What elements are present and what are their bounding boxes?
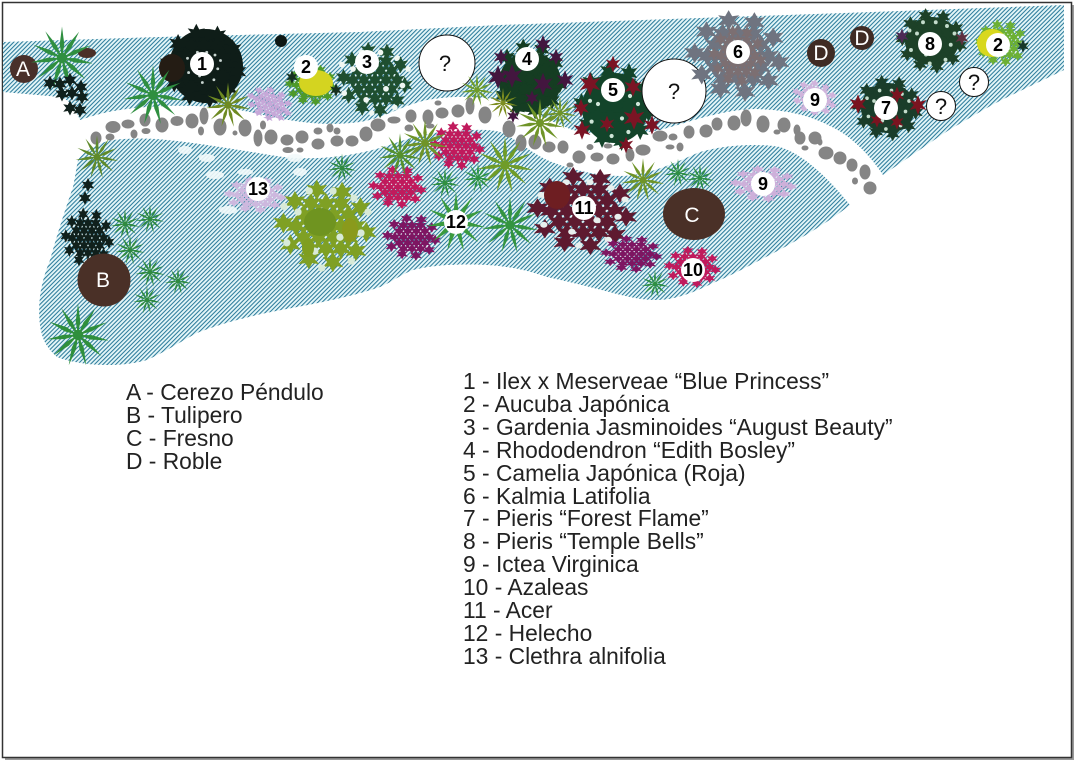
legend: trees: B - Tulipero [126,402,243,428]
shrub 6: Kalmia: 6 [733,42,743,62]
shrub 3: Gardenia [336,42,412,118]
legend: plants: 4 - Rhododendron “Edith Bosley” [463,437,795,463]
shrub 11: Acer: 11 [574,198,594,218]
hatched garden beds [3,5,1064,365]
olive shrub [273,180,377,272]
legend: plants: 12 - Helecho [463,620,592,646]
large fern bottom left [46,304,109,366]
black dot marker [275,35,287,47]
olive fern near Acer [621,158,665,201]
legend: plants [463,368,893,669]
small fern above olive shrub [328,154,356,182]
small ferns near B [110,205,191,314]
unknown plant circle upper [960,68,988,96]
shrub 4: Rhododendron [488,35,573,123]
olive ferns at path [378,120,538,253]
plant 9: Ictea upper: 9 [810,90,820,110]
legend: plants: 1 - Ilex x Meserveae “Blue Princess” [463,368,829,394]
shrub 1: Ilex: 1 [197,54,207,74]
tree C: Fresno: C [684,204,700,227]
legend: plants: 13 - Clethra alnifolia [463,643,666,669]
unknown plant circle large [419,35,475,91]
plant 9: Ictea lower: 9 [758,174,768,194]
white flowers around 13 [178,146,307,214]
lilac plant [240,79,299,128]
legend: plants: 6 - Kalmia Latifolia [463,483,651,509]
shrub 6: Kalmia [684,10,789,102]
unknown plant circle large: ? [439,51,451,76]
dark shrub near B [60,178,114,269]
legend: plants: 7 - Pieris “Forest Flame” [463,505,709,531]
legend: plants: 3 - Gardenia Jasminoides “August Beauty” [463,414,893,440]
plant 10: Azaleas: 10 [683,260,703,280]
fern near 1 [123,65,183,125]
legend: plants: 11 - Acer [463,597,553,623]
shrub 5: Camelia [573,56,660,153]
tree B: Tulipero [78,254,130,306]
legend: plants: 9 - Ictea Virginica [463,551,639,577]
shrub 2: Aucuba right: 2 [993,35,1003,55]
purple shrub [382,213,441,261]
tree B: Tulipero: B [96,269,110,292]
magenta shrub upper [429,121,485,171]
small ferns above C [641,159,714,298]
tree A: Cerezo Péndulo [10,55,38,83]
small brown tree trunk [78,48,96,58]
tree D large: D [813,42,829,65]
tree D small [850,26,874,50]
legend: trees: A - Cerezo Péndulo [126,379,324,405]
shrub 3: Gardenia: 3 [362,52,372,72]
legend: trees: C - Fresno [126,425,234,451]
shrub 8: Pieris Temple Bells [895,8,969,74]
fern near A [30,27,93,89]
stepping stone path [91,98,876,194]
shrub 2: Aucuba right [974,19,1029,67]
magenta shrub lower [368,165,427,209]
plant 9: Ictea lower [729,165,798,203]
shrub 8: Pieris Temple Bells: 8 [925,34,935,54]
shrub 5: Camelia: 5 [608,80,618,100]
tree A: Cerezo Péndulo: A [16,58,30,81]
unknown plant circle upper: ? [968,70,980,95]
unknown plant circle lower [926,92,956,120]
legend: trees: D - Roble [126,448,222,474]
plant 13: Clethra [223,176,288,214]
plant 12: Helecho [426,192,486,252]
shrub 11: Acer [526,167,637,255]
legend: plants: 5 - Camelia Japónica (Roja) [463,460,746,486]
shrub 7: Pieris Forest Flame: 7 [881,98,891,118]
shrub 7: Pieris Forest Flame [850,75,926,141]
tree C: Fresno [663,188,725,240]
olive ferns around path near 4 and 5 [460,74,576,147]
plant 10: Azaleas [664,246,721,288]
purple shrub near 10 [600,235,663,273]
tree D large [807,39,835,67]
shrub 4: Rhododendron: 4 [522,49,532,69]
legend: plants: 10 - Azaleas [463,574,588,600]
shrub 2: Aucuba [284,55,342,106]
legend: trees [126,379,324,474]
legend: plants: 8 - Pieris “Temple Bells” [463,528,704,554]
shrub 2: Aucuba: 2 [301,57,311,77]
shrub 1: Ilex [159,24,246,108]
plant 13: Clethra: 13 [248,179,268,199]
tree D small: D [854,27,870,50]
plant 12: Helecho: 12 [446,212,466,232]
unknown plant circle lower: ? [935,94,947,119]
olive fern near 1 [205,82,250,127]
dark shrub near A [43,72,89,118]
legend: plants: 2 - Aucuba Japónica [463,391,670,417]
unknown plant circle beside 5: ? [668,79,680,104]
plant 9: Ictea upper [787,74,842,121]
unknown plant circle beside 5 [642,59,706,123]
olive fern top left of lower bed [75,135,119,178]
